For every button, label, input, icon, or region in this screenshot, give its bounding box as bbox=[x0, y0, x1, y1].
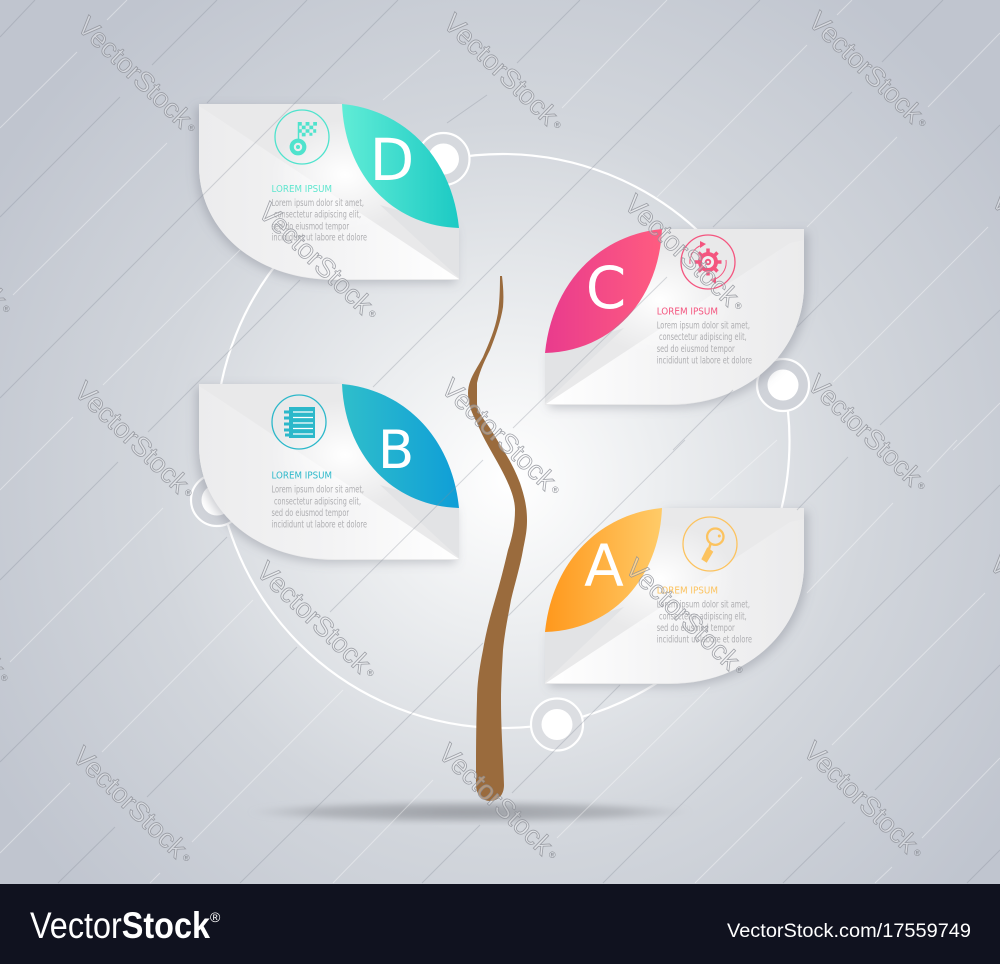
body C: incididunt ut labore et dolore bbox=[657, 355, 752, 366]
icon: flag bbox=[275, 110, 329, 164]
watermarks: VectorStock bbox=[620, 553, 746, 676]
body D: Lorem ipsum dolor sit amet, bbox=[272, 198, 364, 209]
panel: B bbox=[199, 384, 459, 560]
node top bbox=[418, 133, 470, 185]
watermark registered marks: ® bbox=[736, 665, 743, 675]
letter C: C bbox=[586, 254, 626, 322]
ground shadow bbox=[248, 801, 692, 823]
watermark registered marks: ® bbox=[369, 309, 376, 319]
card D bbox=[199, 104, 459, 280]
watermark registered marks: ® bbox=[914, 848, 921, 858]
node bottom bbox=[531, 698, 583, 750]
letter A: A bbox=[584, 532, 624, 600]
watermarks: VectorStock bbox=[803, 6, 929, 129]
tree trunk bbox=[468, 276, 527, 801]
body A: Lorem ipsum dolor sit amet, bbox=[657, 600, 750, 611]
watermarks: VectorStock bbox=[67, 741, 193, 864]
card B bbox=[199, 384, 459, 560]
watermarks: VectorStock bbox=[251, 556, 377, 679]
card A bbox=[545, 508, 804, 684]
leaf C bbox=[545, 229, 662, 353]
heading A: LOREM IPSUM bbox=[657, 586, 718, 597]
body B: Lorem ipsum dolor sit amet, bbox=[272, 485, 364, 496]
watermarks: VectorStock bbox=[69, 376, 195, 499]
body D bbox=[272, 198, 367, 244]
icon: gear bbox=[681, 235, 735, 289]
body B: incididunt ut labore et dolore bbox=[272, 520, 367, 531]
watermarks: VectorStock bbox=[253, 197, 379, 320]
panel: D bbox=[199, 104, 459, 280]
card C bbox=[545, 229, 804, 405]
leaf D bbox=[342, 104, 459, 228]
watermark registered marks: ® bbox=[185, 488, 192, 498]
body C bbox=[657, 321, 752, 366]
node left bbox=[191, 474, 243, 526]
watermarks: VectorStock bbox=[438, 8, 564, 131]
watermarks: VectorStock bbox=[798, 736, 924, 859]
watermarks: VectorStock bbox=[436, 373, 562, 496]
watermark registered marks: ® bbox=[1, 673, 8, 683]
watermark registered marks: ® bbox=[554, 120, 561, 130]
body B bbox=[272, 485, 367, 531]
body D: sed do eiusmod tempor bbox=[272, 221, 350, 232]
footer registered mark: ® bbox=[210, 909, 221, 925]
panel: C bbox=[545, 229, 804, 405]
body B: sed do eiusmod tempor bbox=[272, 508, 350, 519]
watermarks: VectorStock bbox=[433, 738, 559, 861]
leaf B bbox=[342, 384, 459, 508]
watermarks: VectorStock bbox=[72, 11, 198, 134]
letter D: D bbox=[370, 126, 414, 194]
watermark registered marks: ® bbox=[183, 853, 190, 863]
body A: consectetur adipiscing elit, bbox=[659, 611, 747, 622]
watermark registered marks bbox=[1, 118, 926, 863]
icon: magnifier bbox=[683, 517, 737, 571]
watermark registered marks: ® bbox=[918, 481, 925, 491]
body C: consectetur adipiscing elit, bbox=[659, 332, 747, 343]
heading C: LOREM IPSUM bbox=[657, 307, 718, 318]
body D: consectetur adipiscing elit, bbox=[274, 210, 361, 221]
body A bbox=[657, 600, 752, 645]
watermark registered marks: ® bbox=[735, 301, 742, 311]
icon: notebook bbox=[272, 395, 326, 449]
footer bar bbox=[0, 884, 1000, 964]
body B: consectetur adipiscing elit, bbox=[274, 496, 361, 507]
body A: incididunt ut labore et dolore bbox=[657, 634, 752, 645]
panel: A bbox=[545, 508, 804, 684]
body D: incididunt ut labore et dolore bbox=[272, 233, 367, 244]
watermarks: VectorStock bbox=[619, 189, 745, 312]
watermarks: VectorStock bbox=[802, 369, 928, 492]
watermark registered marks: ® bbox=[188, 123, 195, 133]
leaf A bbox=[545, 508, 662, 632]
body A: sed do eiusmod tempor bbox=[657, 623, 735, 634]
heading B: LOREM IPSUM bbox=[272, 470, 332, 481]
body C: Lorem ipsum dolor sit amet, bbox=[657, 321, 750, 332]
node right bbox=[757, 359, 809, 411]
watermark registered marks: ® bbox=[552, 485, 559, 495]
letter B: B bbox=[378, 420, 414, 481]
watermark registered marks: ® bbox=[549, 850, 556, 860]
watermark registered marks: ® bbox=[919, 118, 926, 128]
watermark registered marks: ® bbox=[367, 668, 374, 678]
watermark registered marks: ® bbox=[3, 304, 10, 314]
footer id: VectorStock.com/17559749 bbox=[727, 921, 971, 942]
heading D: LOREM IPSUM bbox=[272, 184, 332, 195]
ring around tree bbox=[216, 154, 790, 728]
body C: sed do eiusmod tempor bbox=[657, 344, 735, 355]
footer logo: VectorStock bbox=[30, 905, 210, 946]
